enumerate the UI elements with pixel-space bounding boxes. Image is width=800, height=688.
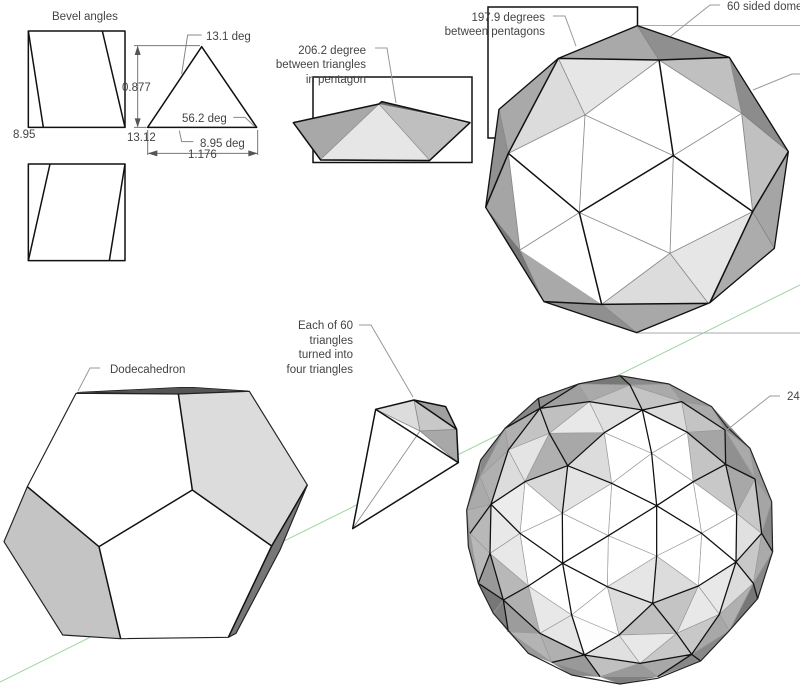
- bevel labels: 8.95 deg: [200, 138, 245, 150]
- callout: 60 sided dome: [671, 1, 800, 36]
- callout: each of 60 triangles: turned into: [299, 349, 353, 361]
- callout: each of 60 triangles: Each of 60: [298, 320, 353, 332]
- 60 sided dome: [486, 26, 788, 333]
- panel: pentagon box: [313, 77, 472, 162]
- bevel labels: 13.12: [127, 132, 156, 144]
- bevel labels: 0.877: [122, 82, 151, 94]
- callout: dodecahedron: Dodecahedron: [110, 364, 185, 376]
- dodecahedron: [4, 387, 307, 639]
- sphere facets: [467, 376, 773, 684]
- sphere base: [467, 376, 773, 684]
- panel: bevel rectangle top: [28, 31, 125, 127]
- sphere outline: [467, 376, 773, 684]
- callout: 206.2 degree: [276, 45, 396, 103]
- bevel labels: [13, 31, 251, 161]
- callout: each of 60 triangles: four triangles: [287, 364, 353, 376]
- heading: bevel angles: Bevel angles: [52, 11, 118, 23]
- bevel labels: 1.176: [188, 149, 217, 161]
- bevel labels: 13.1 deg: [206, 31, 251, 43]
- callout: 206.2 degree: 206.2 degree: [298, 45, 366, 57]
- callout: 197.9 degrees: 197.9 degrees: [471, 12, 545, 24]
- box behind dome: [488, 7, 638, 138]
- bevel labels: 8.95: [13, 129, 35, 141]
- leader: dome right: [753, 74, 800, 90]
- panel: dimensioned triangle: [134, 35, 258, 156]
- small subdivided triangle: [353, 400, 458, 529]
- callout: 206.2 degree: between triangles: [276, 59, 366, 71]
- callout: 240: [727, 391, 800, 430]
- green axis line: [0, 285, 800, 682]
- panel: bevel rectangle bottom: [28, 164, 125, 261]
- callout: 197.9 degrees: [445, 12, 576, 46]
- sphere thick edges: [470, 376, 773, 677]
- callout: 240: 24: [787, 391, 800, 403]
- callout: each of 60 triangles: [287, 320, 413, 397]
- callout: 197.9 degrees: between pentagons: [445, 26, 545, 38]
- bevel labels: 56.2 deg: [182, 113, 227, 125]
- 240 sided sphere: [467, 376, 773, 684]
- callout: 206.2 degree: in pentagon: [306, 74, 366, 86]
- pentagon side view: [293, 102, 470, 161]
- dome extension lines: [636, 26, 800, 333]
- callout: dodecahedron: [78, 364, 185, 391]
- callout: each of 60 triangles: triangles: [310, 335, 353, 347]
